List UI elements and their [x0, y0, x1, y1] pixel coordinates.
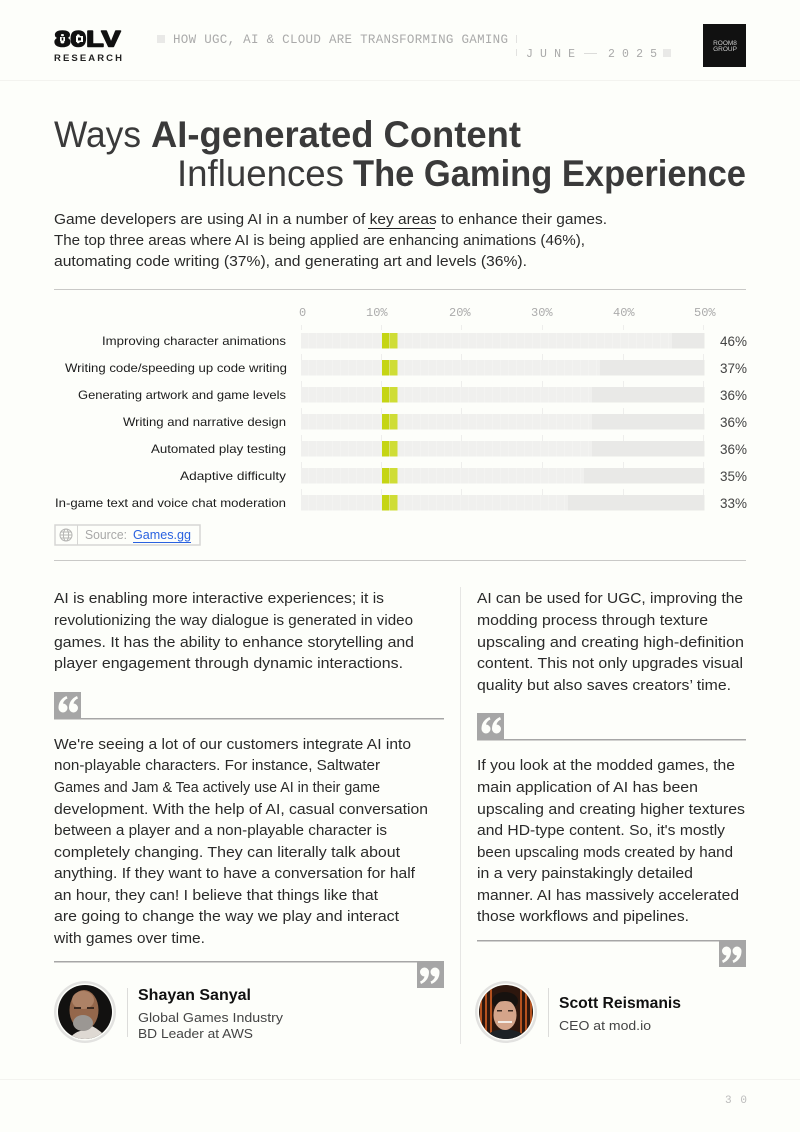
- icon: closing quote right: [477, 940, 746, 967]
- left quote text: [53, 736, 428, 947]
- left quote text: Games and Jam & Tea actively use AI in their game: [54, 779, 380, 796]
- report title: HOW UGC, AI & CLOUD ARE TRANSFORMING GAMING: [173, 33, 508, 47]
- speaker: Shayan Sanyal: BD Leader at AWS: [138, 1026, 253, 1041]
- axis labels: 30%: [531, 306, 553, 320]
- date: [516, 48, 671, 61]
- header: [0, 24, 800, 81]
- icon: opening quote left: [54, 692, 444, 720]
- source tag: Source:: [85, 528, 127, 542]
- left column intro: revolutionizing the way dialogue is generated in video: [54, 612, 413, 629]
- right column intro: modding process through texture: [477, 612, 708, 629]
- row: play testing: Automated play testing: [151, 442, 286, 456]
- row: character animations: Improving character animations: [102, 334, 286, 348]
- right column intro: quality but also saves creators’ time.: [477, 677, 731, 694]
- axis labels: 40%: [613, 306, 635, 320]
- right quote text: If you look at the modded games, the: [477, 757, 735, 774]
- title: AI-generated Content: [151, 114, 521, 155]
- right column intro: upscaling and creating high-definition: [477, 634, 744, 651]
- source tag: [55, 525, 200, 545]
- axis labels: 50%: [694, 306, 716, 320]
- row: artwork and levels: 36%: [720, 387, 747, 403]
- right column intro: content. This not only upgrades visual: [477, 655, 743, 672]
- row: code writing: [65, 360, 747, 376]
- right column intro: [477, 590, 744, 694]
- date: JUNE: [526, 48, 575, 61]
- left quote text: non-playable characters. For instance, Saltwater: [54, 757, 380, 774]
- row: moderation: [55, 495, 747, 511]
- logo: 80LV: [54, 26, 121, 52]
- axis labels: [299, 306, 716, 320]
- row: artwork and levels: [78, 387, 747, 403]
- left column intro: AI is enabling more interactive experiences; it is: [54, 590, 384, 607]
- logo: RESEARCH: [54, 53, 122, 64]
- row: artwork and levels: Generating artwork and game levels: [78, 388, 286, 402]
- row: narrative design: Writing and narrative design: [123, 415, 286, 429]
- speaker: Scott Reismanis: CEO at mod.io: [559, 1018, 651, 1033]
- source tag: Games.gg: [133, 528, 191, 542]
- icon: opening quote right: [477, 713, 746, 740]
- row: moderation: In-game text and voice chat moderation: [55, 496, 286, 510]
- intro text: automating code writing (37%), and generating art and levels (36%).: [54, 253, 527, 270]
- left quote text: anything. If they want to have a conversation for half: [54, 865, 416, 882]
- row: play testing: 36%: [720, 441, 747, 457]
- axis labels: 0: [299, 306, 306, 320]
- icon: globe: [60, 529, 72, 541]
- row: code writing: Writing code/speeding up code writing: [65, 361, 287, 375]
- intro text: Game developers are using AI in a number of key areas to enhance their games.: [54, 211, 607, 228]
- partner logo: [703, 24, 746, 67]
- intro text: [54, 211, 607, 270]
- title: Ways: [54, 114, 141, 155]
- right quote text: and HD-type content. So, it's mostly: [477, 822, 726, 839]
- title: [54, 114, 746, 194]
- left quote text: completely changing. They can literally talk about: [54, 844, 401, 861]
- left quote text: with games over time.: [53, 930, 205, 947]
- row: adaptive difficulty: [180, 468, 747, 484]
- right quote text: manner. AI has massively accelerated: [477, 887, 739, 904]
- speaker: Shayan Sanyal: Global Games Industry: [138, 1010, 284, 1025]
- title: The Gaming Experience: [353, 153, 746, 194]
- right quote text: upscaling and creating higher textures: [477, 801, 745, 818]
- portrait: [54, 981, 116, 1043]
- row: narrative design: [123, 414, 747, 430]
- axis labels: 10%: [366, 306, 388, 320]
- row: play testing: [151, 441, 747, 457]
- speaker: Scott Reismanis: [475, 981, 681, 1043]
- right quote text: [477, 757, 745, 925]
- right quote text: those workflows and pipelines.: [477, 908, 689, 925]
- left quote text: are going to change the way we play and interact: [54, 908, 400, 925]
- icon: closing quote left: [54, 961, 444, 988]
- left quote text: development. With the help of AI, casual conversation: [54, 801, 428, 818]
- left quote text: between a player and a non-playable character is: [54, 822, 387, 839]
- logo: [54, 26, 122, 64]
- left quote text: We're seeing a lot of our customers integrate AI into: [54, 736, 411, 753]
- right column intro: AI can be used for UGC, improving the: [477, 590, 743, 607]
- right quote text: been upscaling mods created by hand: [477, 844, 733, 861]
- date: 2025: [608, 48, 657, 61]
- portrait: [475, 981, 537, 1043]
- left column intro: player engagement through dynamic interactions.: [54, 655, 403, 672]
- speaker: Shayan Sanyal: Shayan Sanyal: [138, 987, 251, 1004]
- intro text: The top three areas where AI is being applied are enhancing animations (46%),: [54, 232, 585, 249]
- row: code writing: 37%: [720, 360, 747, 376]
- speaker: Shayan Sanyal: [54, 981, 284, 1043]
- page number: 30: [725, 1095, 747, 1107]
- row: adaptive difficulty: Adaptive difficulty: [180, 469, 286, 483]
- left quote text: an hour, they can! I believe that things like that: [54, 887, 379, 904]
- row: character animations: [102, 333, 747, 349]
- row: narrative design: 36%: [720, 414, 747, 430]
- speaker: Scott Reismanis: Scott Reismanis: [559, 995, 681, 1012]
- row: character animations: 46%: [720, 333, 747, 349]
- axis labels: 20%: [449, 306, 471, 320]
- partner logo: GROUP: [713, 46, 737, 53]
- title: Influences: [177, 153, 344, 194]
- left column intro: games. It has the ability to enhance storytelling and: [54, 634, 414, 651]
- right quote text: in a very painstakingly detailed: [477, 865, 693, 882]
- row: moderation: 33%: [720, 495, 747, 511]
- row: adaptive difficulty: 35%: [720, 468, 747, 484]
- right quote text: main application of AI has been: [477, 779, 698, 796]
- partner logo: ROOM8: [713, 40, 737, 47]
- bar chart: [55, 306, 747, 511]
- left column intro: [54, 590, 414, 672]
